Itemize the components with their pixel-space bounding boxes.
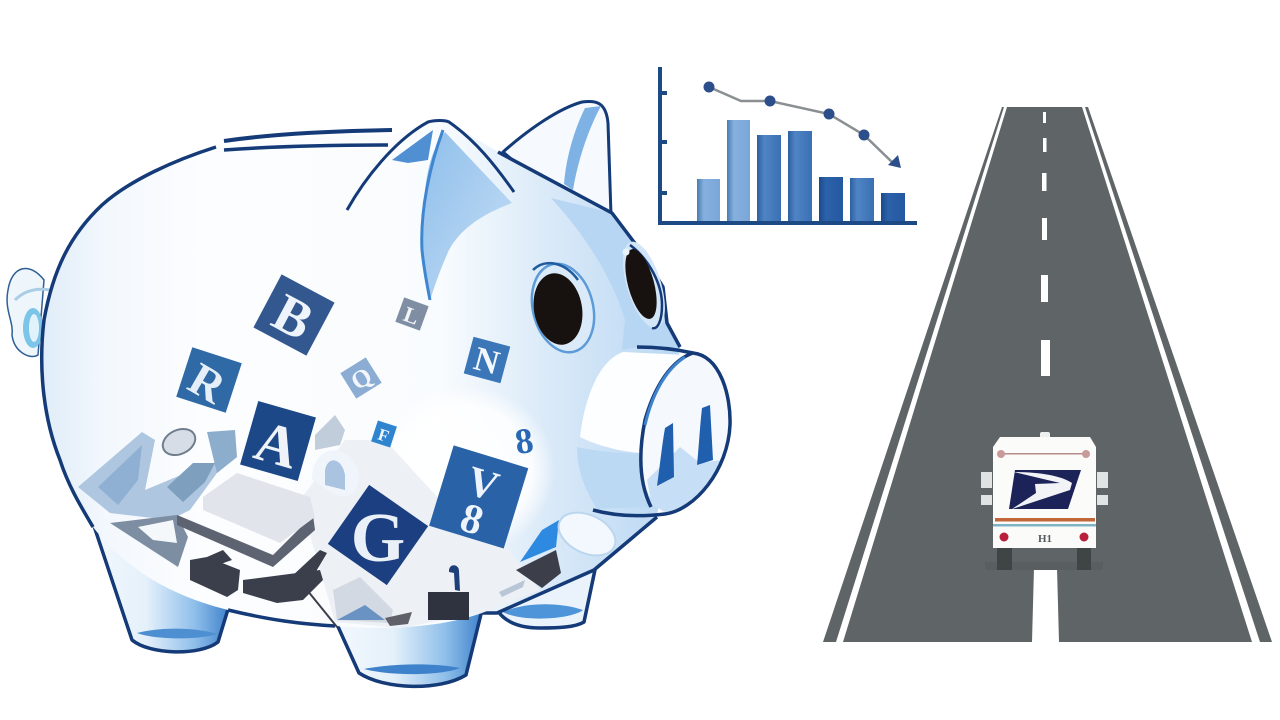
letter tile: power G	[315, 474, 441, 603]
mail truck	[981, 432, 1108, 570]
road	[823, 107, 1272, 642]
letter tile: ribbed symbol	[252, 274, 335, 357]
black tag	[428, 565, 469, 620]
letter tile: X and 8: V	[461, 458, 504, 511]
truck body	[993, 437, 1096, 548]
letter tile: R	[174, 347, 242, 418]
near eye	[523, 257, 603, 359]
symbol: blue 8: 8	[512, 420, 536, 462]
truck wheels	[997, 548, 1091, 570]
body highlight	[375, 385, 555, 555]
licence plate: H1	[1038, 533, 1052, 545]
snout	[577, 347, 730, 516]
body outline	[42, 147, 680, 626]
truck stripes	[993, 518, 1096, 526]
letter tile: A	[239, 401, 316, 484]
road surface	[823, 107, 1272, 642]
piggy bank	[7, 101, 730, 686]
letter tile: N: N	[470, 340, 504, 383]
pig body	[42, 122, 680, 628]
bars	[697, 120, 905, 223]
letter tile: Q	[340, 357, 382, 399]
truck mirrors	[981, 472, 1108, 505]
letter tile: ribbed symbol: B	[263, 282, 323, 352]
eagle logo	[1009, 470, 1081, 509]
pig tail	[7, 269, 50, 356]
far eye	[615, 237, 673, 333]
coins and office items pile	[78, 415, 622, 628]
letter tile: small gray	[395, 297, 429, 332]
pig far leg	[497, 565, 596, 628]
trend line with arrow	[704, 82, 901, 168]
chart axes	[660, 67, 917, 223]
truck shadow	[985, 562, 1103, 570]
black binder clips	[190, 550, 337, 627]
letter tile: N	[463, 337, 510, 384]
letter tile: A: A	[248, 407, 306, 481]
declining bar chart	[660, 67, 917, 223]
truck marker lights	[997, 450, 1090, 458]
letter tile: small gray: L	[400, 301, 423, 330]
letter tile: R: R	[180, 353, 235, 414]
tail lights	[1000, 532, 1088, 542]
letter tile: X and 8	[428, 445, 528, 553]
pig rear leg	[92, 520, 229, 652]
letter tile: X and 8: 8	[455, 495, 488, 545]
head shade band	[551, 198, 680, 350]
pig front leg	[335, 610, 482, 686]
coin slot	[224, 130, 392, 150]
truck roof light	[1040, 432, 1050, 439]
nostrils	[657, 405, 713, 486]
letter tile: F: F	[376, 425, 391, 446]
road edge lines	[836, 107, 1260, 642]
letter tile: power G: G	[351, 500, 405, 577]
centre dashes	[1032, 112, 1059, 642]
pig right ear	[503, 101, 611, 215]
letter tile: Q: Q	[346, 363, 377, 396]
pig left ear	[347, 120, 514, 300]
letter tile: F	[371, 420, 397, 448]
